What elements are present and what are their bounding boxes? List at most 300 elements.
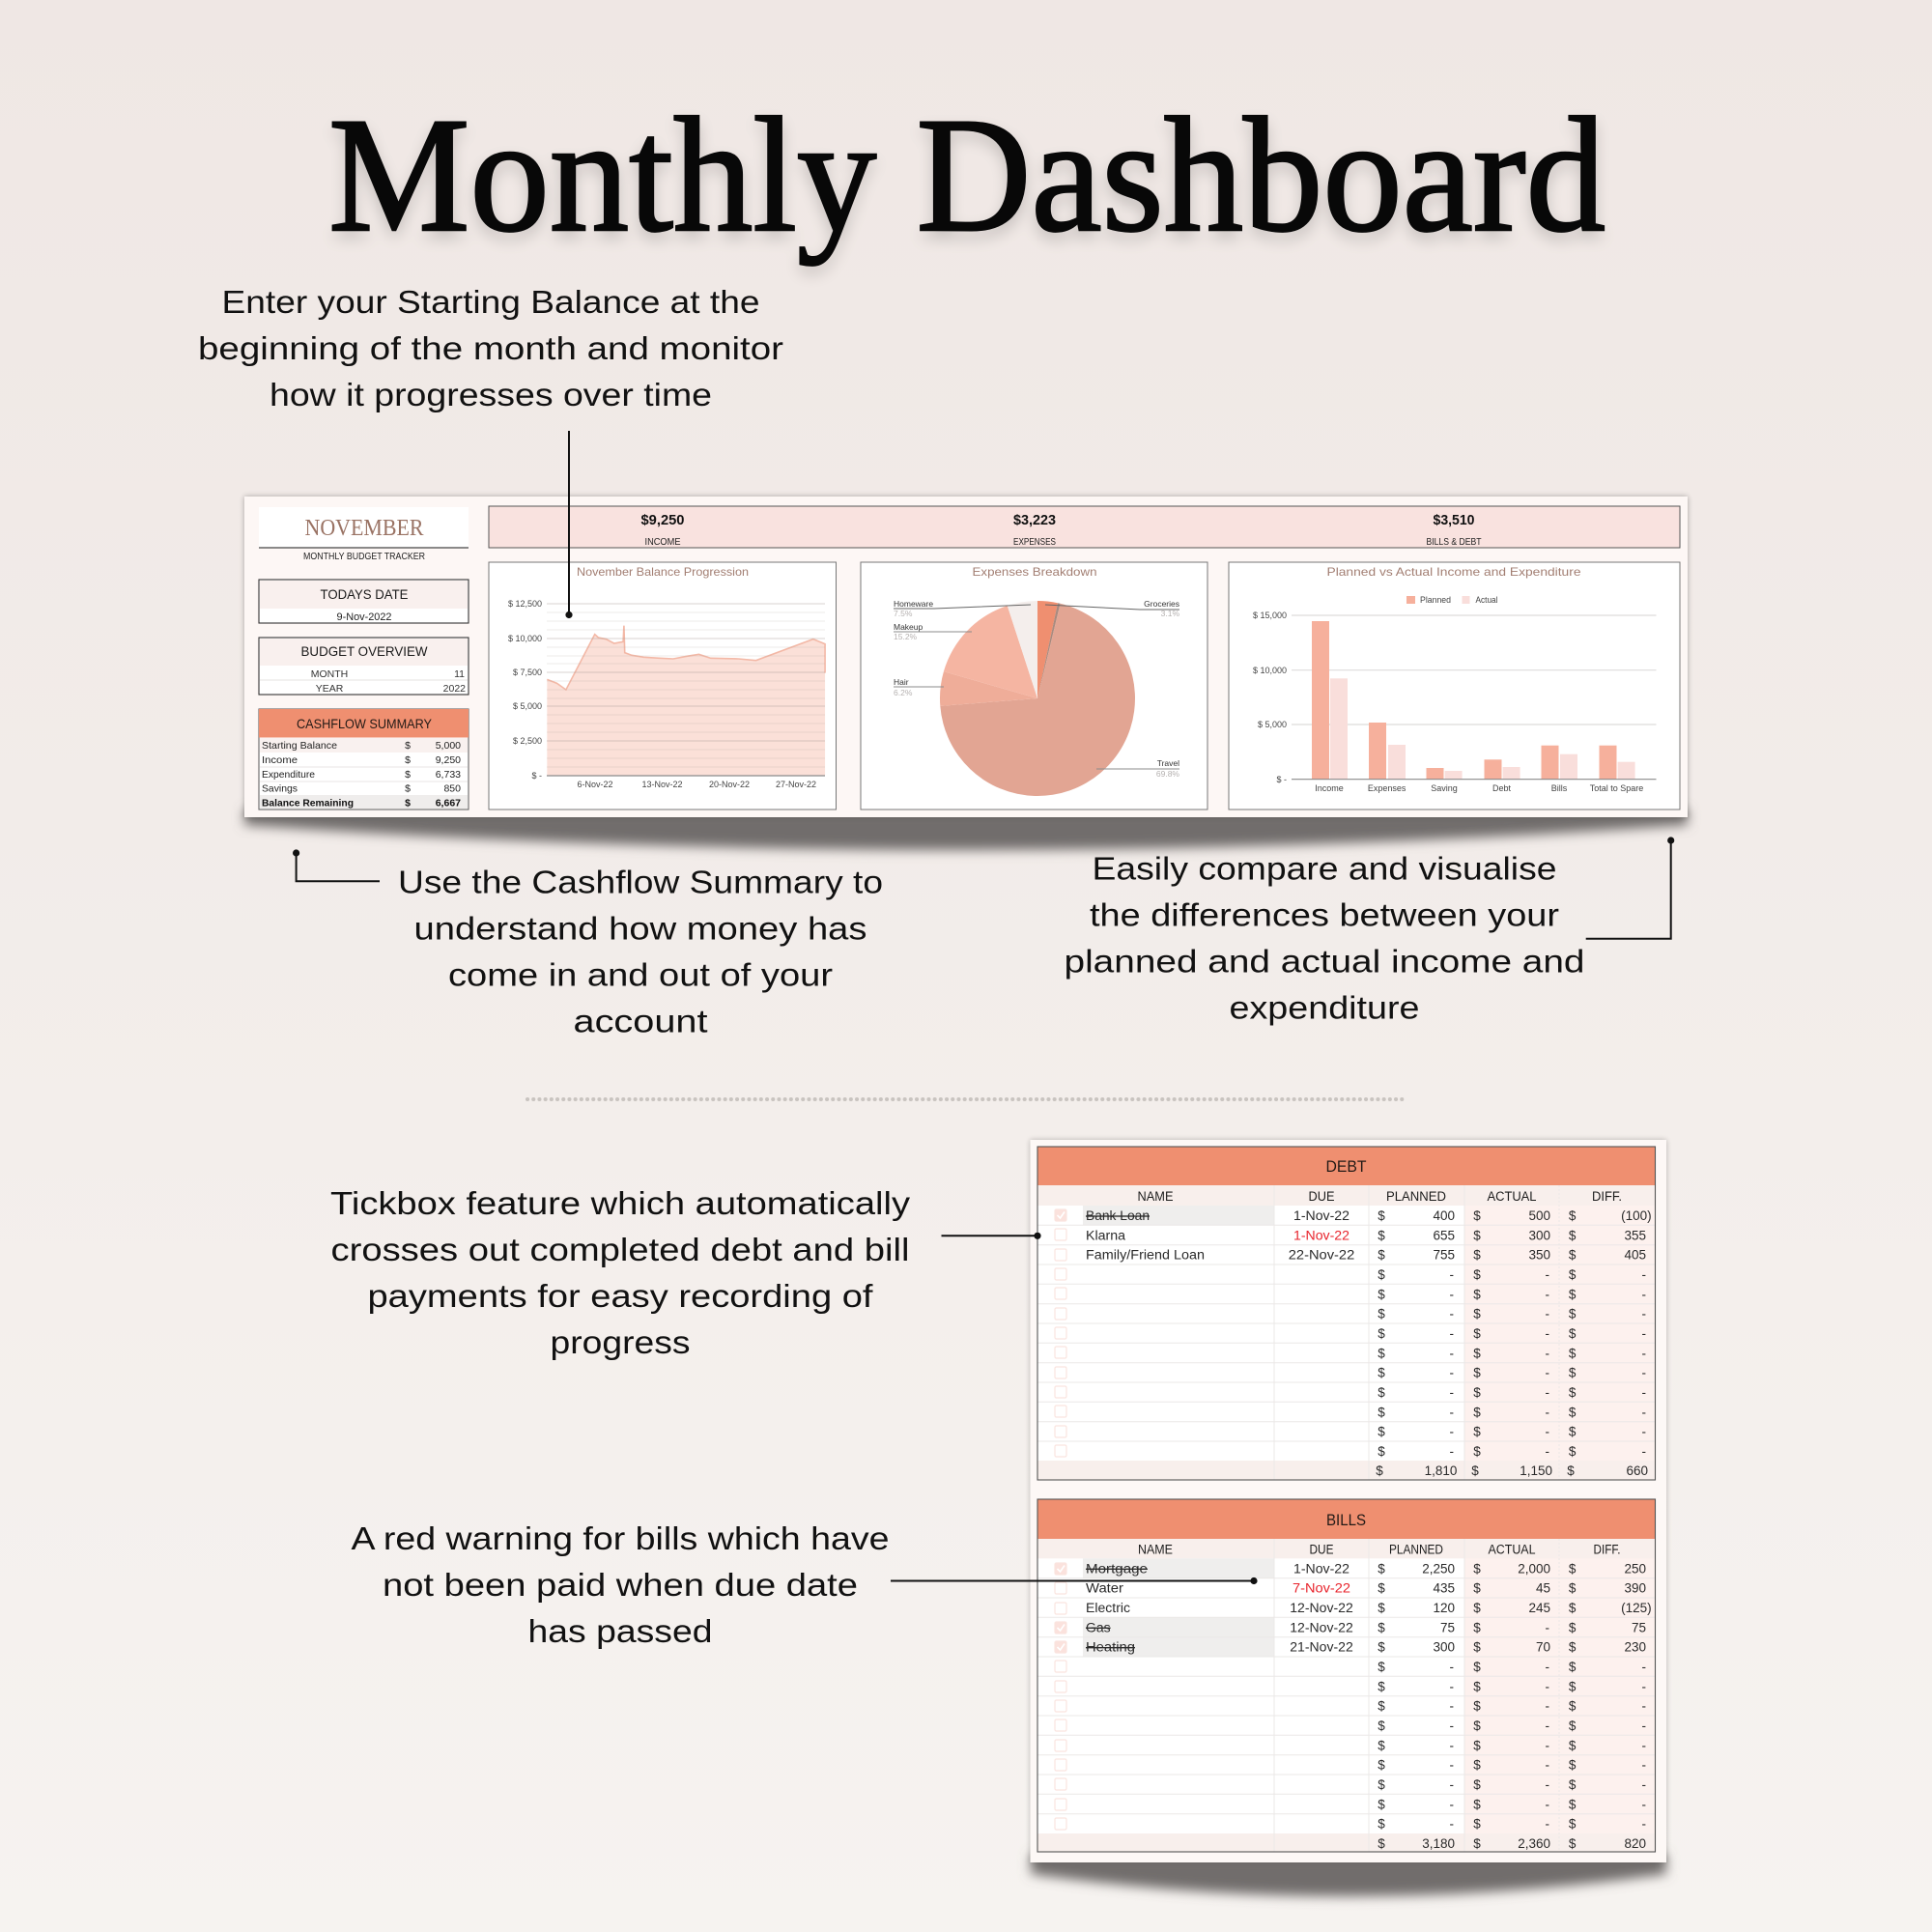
month heading [259, 507, 469, 562]
bills rows: $ [1473, 1581, 1481, 1596]
bills rows: $ [1378, 1699, 1385, 1714]
arrow: tickbox connector [941, 1233, 1041, 1239]
bills rows: $ [1378, 1719, 1385, 1733]
bills rows: $ [1569, 1797, 1577, 1811]
legend: Actual [1476, 595, 1497, 605]
debt rows: 500 [1528, 1208, 1550, 1223]
legend: Planned [1420, 595, 1451, 605]
debt rows: $ [1378, 1444, 1385, 1459]
bills rows: - [1449, 1777, 1454, 1792]
panel: tables card [1030, 1140, 1666, 1896]
cashflow summary table: 6,733 [436, 769, 461, 781]
debt rows: $ [1569, 1385, 1577, 1400]
bills rows: (125) [1621, 1601, 1652, 1615]
debt rows: - [1642, 1326, 1646, 1341]
debt rows: - [1449, 1307, 1454, 1321]
bills rows: $ [1569, 1561, 1577, 1576]
bar chart: planned vs actual: Debt [1492, 783, 1512, 793]
debt rows: $ [1473, 1405, 1481, 1419]
bills rows: $ [1378, 1738, 1385, 1752]
pie chart: expenses breakdown [861, 562, 1208, 810]
bills rows: - [1642, 1719, 1646, 1733]
debt totals: 1,810 [1425, 1463, 1457, 1478]
bills rows: $ [1473, 1699, 1481, 1714]
bar chart: planned vs actual: $ 10,000 [1253, 666, 1287, 675]
bills rows: 300 [1433, 1640, 1455, 1655]
bills rows: - [1642, 1797, 1646, 1811]
debt rows: - [1546, 1326, 1549, 1341]
bills rows: $ [1378, 1601, 1385, 1615]
caption: cashflow summary [398, 864, 883, 1038]
bills rows: $ [1473, 1561, 1481, 1576]
debt rows: - [1642, 1307, 1646, 1321]
debt rows: $ [1569, 1267, 1577, 1282]
debt rows: $ [1378, 1425, 1385, 1439]
bills rows: Heating [1086, 1640, 1135, 1655]
debt rows: 300 [1528, 1228, 1550, 1242]
bills rows: $ [1378, 1640, 1385, 1655]
bills rows: Electric [1086, 1601, 1130, 1615]
bills rows: $ [1473, 1777, 1481, 1792]
bills rows: - [1546, 1738, 1549, 1752]
bills rows: - [1449, 1758, 1454, 1773]
debt rows: $ [1473, 1425, 1481, 1439]
bar chart: planned vs actual: Total to Spare [1590, 783, 1643, 793]
debt rows: - [1642, 1366, 1646, 1380]
area chart: balance progression: $ 10,000 [508, 634, 542, 643]
caption: red warning [352, 1520, 889, 1649]
bills rows: 245 [1528, 1601, 1550, 1615]
debt rows: - [1546, 1346, 1549, 1360]
bills rows: $ [1473, 1620, 1481, 1634]
caption: starting balance [198, 284, 783, 412]
debt rows: $ [1378, 1326, 1385, 1341]
bills totals: $ [1378, 1836, 1385, 1851]
caption: starting balance: beginning of the month and monitor [198, 330, 783, 366]
pie chart: expenses breakdown: Homeware [894, 599, 933, 609]
caption: red warning: not been paid when due date [383, 1567, 858, 1603]
bills rows [1086, 1561, 1652, 1832]
bills rows: $ [1473, 1679, 1481, 1693]
caption: planned vs actual: Easily compare and visualise [1092, 851, 1557, 887]
arrow: cashflow connector [293, 849, 380, 881]
cashflow summary table: Starting Balance [262, 740, 337, 752]
debt rows: $ [1473, 1208, 1481, 1223]
caption: red warning: A red warning for bills which have [352, 1520, 889, 1556]
stats band: BILLS & DEBT [1426, 537, 1482, 548]
debt rows: $ [1473, 1307, 1481, 1321]
debt rows: - [1546, 1405, 1549, 1419]
debt rows: $ [1378, 1346, 1385, 1360]
area chart: balance progression [489, 562, 837, 810]
bills rows: $ [1378, 1777, 1385, 1792]
bills column headers [1138, 1542, 1621, 1557]
bills rows: - [1546, 1719, 1549, 1733]
debt rows: 405 [1624, 1248, 1646, 1263]
bills rows: - [1546, 1620, 1549, 1634]
bills rows: - [1449, 1679, 1454, 1693]
bills rows: Mortgage [1086, 1561, 1148, 1576]
debt rows: $ [1473, 1346, 1481, 1360]
debt rows: $ [1378, 1287, 1385, 1301]
debt column headers: DIFF. [1592, 1189, 1622, 1204]
bills rows: $ [1569, 1738, 1577, 1752]
debt rows: - [1546, 1444, 1549, 1459]
bills rows: 7-Nov-22 [1293, 1581, 1350, 1596]
bills rows: $ [1378, 1561, 1385, 1576]
debt totals: 1,150 [1520, 1463, 1552, 1478]
debt rows: Bank Loan [1086, 1208, 1150, 1223]
caption: cashflow summary: come in and out of your [448, 956, 833, 992]
bar chart: planned vs actual: $ 5,000 [1258, 720, 1287, 729]
bills rows: - [1642, 1699, 1646, 1714]
cashflow summary table: $ [405, 740, 411, 752]
bills rows: 75 [1440, 1620, 1455, 1634]
stats band: $3,510 [1434, 513, 1474, 528]
bills rows: - [1642, 1738, 1646, 1752]
debt rows: - [1546, 1425, 1549, 1439]
pie chart: expenses breakdown: Makeup [894, 622, 923, 632]
bills rows: - [1546, 1758, 1549, 1773]
bills rows: - [1449, 1817, 1454, 1832]
debt rows: Klarna [1086, 1228, 1126, 1242]
debt rows: $ [1378, 1307, 1385, 1321]
debt rows: $ [1569, 1248, 1577, 1263]
bills table [1037, 1499, 1656, 1852]
debt rows: $ [1473, 1385, 1481, 1400]
debt rows: - [1449, 1267, 1454, 1282]
debt rows: $ [1378, 1366, 1385, 1380]
budget overview box: BUDGET OVERVIEW [301, 643, 428, 659]
debt rows: $ [1473, 1326, 1481, 1341]
debt rows: $ [1473, 1267, 1481, 1282]
legend [1406, 595, 1497, 605]
cashflow summary table: Savings [262, 782, 298, 794]
bills totals [1378, 1836, 1646, 1851]
debt rows: $ [1473, 1444, 1481, 1459]
area chart: balance progression: $ 7,500 [513, 668, 542, 677]
stats band: $9,250 [641, 513, 684, 528]
debt rows: $ [1378, 1248, 1385, 1263]
todays date box: 9-Nov-2022 [336, 611, 392, 623]
todays date box: TODAYS DATE [321, 586, 408, 602]
bills rows: 1-Nov-22 [1293, 1561, 1350, 1576]
debt totals: $ [1376, 1463, 1383, 1478]
bills rows: $ [1569, 1581, 1577, 1596]
debt rows: $ [1569, 1405, 1577, 1419]
bills rows: 435 [1433, 1581, 1455, 1596]
bills rows: $ [1378, 1679, 1385, 1693]
debt rows: - [1449, 1385, 1454, 1400]
bills rows: - [1546, 1699, 1549, 1714]
bills rows: $ [1378, 1758, 1385, 1773]
debt rows: - [1546, 1385, 1549, 1400]
caption: cashflow summary: understand how money has [413, 910, 867, 946]
bar chart: planned vs actual: $ - [1276, 775, 1287, 784]
caption: starting balance: how it progresses over time [270, 377, 712, 412]
pie chart: expenses breakdown: Hair [894, 677, 909, 687]
bills rows: 12-Nov-22 [1290, 1620, 1353, 1634]
debt rows: - [1642, 1267, 1646, 1282]
bills rows: $ [1473, 1640, 1481, 1655]
area chart: balance progression: $ 5,000 [513, 701, 542, 711]
debt totals: 660 [1626, 1463, 1648, 1478]
debt rows: - [1546, 1267, 1549, 1282]
caption: tickbox feature [330, 1185, 911, 1360]
area chart: balance progression: 13-Nov-22 [641, 780, 683, 789]
bar chart: planned vs actual: Income [1315, 783, 1344, 793]
debt column headers [1138, 1189, 1622, 1204]
debt rows: - [1449, 1444, 1454, 1459]
bills rows: $ [1569, 1758, 1577, 1773]
debt table [1037, 1147, 1656, 1480]
bills rows: $ [1473, 1660, 1481, 1674]
cashflow summary table: Expenditure [262, 769, 315, 781]
todays date box [259, 580, 469, 623]
debt rows: $ [1569, 1287, 1577, 1301]
bills totals: $ [1569, 1836, 1577, 1851]
caption: planned vs actual: expenditure [1229, 990, 1420, 1026]
cashflow summary table: $ [405, 769, 411, 781]
bills rows: $ [1473, 1758, 1481, 1773]
debt rows: - [1642, 1346, 1646, 1360]
bills totals: 3,180 [1422, 1836, 1455, 1851]
bills column headers: DIFF. [1594, 1542, 1621, 1557]
bills rows: 230 [1624, 1640, 1646, 1655]
bar chart: planned vs actual [1229, 562, 1680, 810]
bills rows: Gas [1086, 1620, 1111, 1634]
bills rows: $ [1569, 1640, 1577, 1655]
debt table: DEBT [1325, 1157, 1366, 1176]
debt rows: - [1449, 1346, 1454, 1360]
debt rows: $ [1473, 1287, 1481, 1301]
debt rows: - [1546, 1307, 1549, 1321]
debt rows: 350 [1528, 1248, 1550, 1263]
bills totals: 820 [1624, 1836, 1646, 1851]
title: Monthly Dashboard [328, 84, 1605, 266]
pie chart: expenses breakdown: 69.8% [1156, 769, 1179, 779]
cashflow summary table: 850 [443, 782, 461, 794]
bills rows: $ [1378, 1817, 1385, 1832]
cashflow summary table: 5,000 [436, 740, 461, 752]
arrow: red warning connector [891, 1577, 1258, 1584]
debt column headers: ACTUAL [1488, 1189, 1537, 1204]
debt rows: $ [1378, 1405, 1385, 1419]
caption: red warning: has passed [527, 1613, 713, 1649]
debt totals: $ [1567, 1463, 1575, 1478]
bills rows: - [1546, 1817, 1549, 1832]
debt rows: 1-Nov-22 [1293, 1228, 1350, 1242]
cashflow summary table: Income [262, 754, 298, 766]
debt rows: - [1449, 1287, 1454, 1301]
stats band [489, 506, 1680, 548]
stats band: $3,223 [1013, 513, 1056, 528]
bills column headers: DUE [1310, 1542, 1333, 1557]
bills rows: $ [1378, 1581, 1385, 1596]
caption: starting balance: Enter your Starting Balance at the [222, 284, 759, 320]
bills rows: $ [1473, 1738, 1481, 1752]
debt rows: $ [1473, 1366, 1481, 1380]
debt rows: 355 [1624, 1228, 1646, 1242]
debt rows: $ [1569, 1366, 1577, 1380]
debt rows [1086, 1208, 1652, 1459]
area chart: balance progression: $ - [531, 771, 542, 781]
cashflow summary table: 6,667 [436, 798, 461, 810]
debt rows: 655 [1433, 1228, 1455, 1242]
bills rows: - [1642, 1777, 1646, 1792]
area chart: balance progression: 27-Nov-22 [776, 780, 816, 789]
debt rows: $ [1378, 1208, 1385, 1223]
debt rows: - [1449, 1326, 1454, 1341]
debt rows: $ [1378, 1385, 1385, 1400]
month heading: MONTHLY BUDGET TRACKER [303, 552, 425, 562]
debt totals [1376, 1463, 1648, 1478]
bills rows: 70 [1536, 1640, 1550, 1655]
cashflow summary table: $ [405, 798, 411, 810]
debt rows: - [1449, 1366, 1454, 1380]
bills rows: 45 [1536, 1581, 1550, 1596]
bills rows: $ [1473, 1797, 1481, 1811]
bills rows: 12-Nov-22 [1290, 1601, 1353, 1615]
debt rows: 1-Nov-22 [1293, 1208, 1350, 1223]
bills rows: $ [1569, 1719, 1577, 1733]
bills totals: 2,360 [1518, 1836, 1550, 1851]
bills rows: - [1449, 1660, 1454, 1674]
debt column headers: PLANNED [1386, 1189, 1446, 1204]
debt rows: $ [1569, 1326, 1577, 1341]
debt rows: 22-Nov-22 [1289, 1248, 1354, 1263]
debt rows: - [1642, 1287, 1646, 1301]
bills rows: 120 [1433, 1601, 1455, 1615]
debt rows: $ [1569, 1228, 1577, 1242]
bills rows: - [1642, 1660, 1646, 1674]
bills rows: - [1546, 1797, 1549, 1811]
bills rows: $ [1473, 1817, 1481, 1832]
budget overview box: MONTH [311, 668, 348, 680]
cashflow summary table: Balance Remaining [262, 798, 354, 810]
debt tickboxes [1055, 1209, 1066, 1457]
bills rows: $ [1378, 1660, 1385, 1674]
panel: dashboard card [244, 497, 1688, 850]
bills rows: - [1546, 1679, 1549, 1693]
budget overview box: 11 [454, 668, 465, 680]
stats band: EXPENSES [1013, 537, 1056, 548]
debt rows: - [1449, 1425, 1454, 1439]
caption: planned vs actual [1065, 851, 1584, 1026]
bar chart: planned vs actual: Saving [1431, 783, 1458, 793]
arrow: starting balance connector [565, 431, 573, 618]
cashflow summary table: CASHFLOW SUMMARY [297, 716, 433, 731]
bills rows: $ [1569, 1679, 1577, 1693]
debt rows: Family/Friend Loan [1086, 1248, 1205, 1263]
area chart: balance progression: November Balance Progression [577, 565, 749, 579]
bills rows: $ [1569, 1620, 1577, 1634]
caption: cashflow summary: Use the Cashflow Summary to [398, 864, 883, 899]
bills rows: - [1546, 1660, 1549, 1674]
debt rows: $ [1569, 1307, 1577, 1321]
debt rows: $ [1569, 1208, 1577, 1223]
debt rows: - [1642, 1444, 1646, 1459]
area chart: balance progression: 20-Nov-22 [709, 780, 750, 789]
month heading: NOVEMBER [305, 516, 423, 541]
bills table: BILLS [1326, 1511, 1366, 1529]
bar chart: planned vs actual: Planned vs Actual Income and Expenditure [1327, 565, 1581, 579]
bills rows: - [1642, 1679, 1646, 1693]
bills rows: $ [1569, 1601, 1577, 1615]
caption: cashflow summary: account [574, 1003, 707, 1038]
debt rows: $ [1569, 1425, 1577, 1439]
caption: planned vs actual: planned and actual income and [1065, 944, 1584, 980]
bills tickboxes [1055, 1563, 1066, 1830]
bills rows: 21-Nov-22 [1290, 1640, 1353, 1655]
debt rows: $ [1473, 1248, 1481, 1263]
debt rows: - [1642, 1425, 1646, 1439]
caption: tickbox feature: payments for easy recording of [367, 1278, 873, 1314]
bills rows: - [1546, 1777, 1549, 1792]
bills rows: $ [1569, 1817, 1577, 1832]
debt column headers: NAME [1138, 1189, 1173, 1204]
bills rows: - [1642, 1758, 1646, 1773]
stats band: INCOME [645, 537, 681, 548]
bills rows: - [1642, 1817, 1646, 1832]
area chart: balance progression: $ 12,500 [508, 599, 542, 609]
bills rows: $ [1569, 1777, 1577, 1792]
bills rows: $ [1378, 1797, 1385, 1811]
debt rows: $ [1569, 1346, 1577, 1360]
title: Monthly Dashboard [328, 92, 1605, 273]
area chart: balance progression: $ 2,500 [513, 736, 542, 746]
pie chart: expenses breakdown: 15.2% [894, 632, 918, 641]
bills rows: 2,250 [1422, 1561, 1455, 1576]
bills rows: - [1449, 1719, 1454, 1733]
bar chart: planned vs actual: Bills [1551, 783, 1568, 793]
pie chart: expenses breakdown: Expenses Breakdown [972, 565, 1097, 579]
bills column headers: NAME [1138, 1542, 1173, 1557]
bills rows: $ [1473, 1719, 1481, 1733]
bills rows: $ [1378, 1620, 1385, 1634]
debt rows: $ [1378, 1228, 1385, 1242]
bills rows: - [1449, 1699, 1454, 1714]
bills rows: 2,000 [1518, 1561, 1550, 1576]
pie chart: expenses breakdown: 3.1% [1161, 609, 1179, 618]
bills rows: $ [1569, 1699, 1577, 1714]
caption: tickbox feature: Tickbox feature which automatically [330, 1185, 911, 1221]
bar chart: planned vs actual: $ 15,000 [1253, 611, 1287, 620]
bills rows: 390 [1624, 1581, 1646, 1596]
debt rows: 400 [1433, 1208, 1455, 1223]
debt rows: $ [1378, 1267, 1385, 1282]
budget overview box: YEAR [316, 683, 344, 695]
cashflow summary table: 9,250 [436, 754, 461, 766]
debt rows: - [1642, 1405, 1646, 1419]
bills rows: - [1449, 1797, 1454, 1811]
debt rows: 755 [1433, 1248, 1455, 1263]
pie chart: expenses breakdown: Groceries [1144, 599, 1179, 609]
pie chart: expenses breakdown: 7.5% [894, 609, 913, 618]
pie chart: expenses breakdown: 6.2% [894, 688, 913, 697]
bills rows: 75 [1632, 1620, 1646, 1634]
debt rows: - [1546, 1287, 1549, 1301]
debt rows: (100) [1621, 1208, 1652, 1223]
budget overview box: 2022 [443, 683, 466, 695]
bar chart: planned vs actual: Expenses [1368, 783, 1406, 793]
cashflow summary table: $ [405, 754, 411, 766]
bills rows: Water [1086, 1581, 1124, 1596]
debt rows: - [1449, 1405, 1454, 1419]
budget overview box [259, 638, 469, 695]
caption: tickbox feature: crosses out completed debt and bill [330, 1232, 910, 1267]
debt rows: - [1642, 1385, 1646, 1400]
